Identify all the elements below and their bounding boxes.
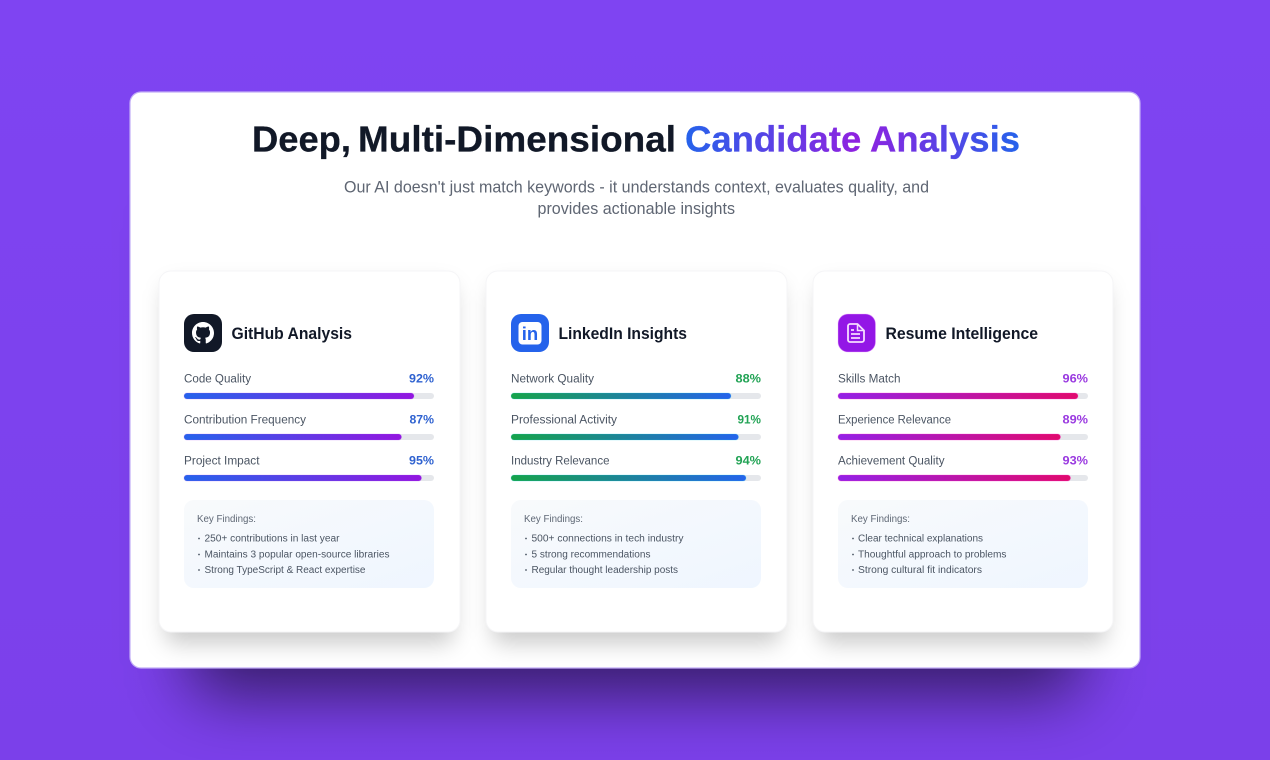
- main white panel: [130, 92, 1140, 668]
- heading: LinkedIn Insights: LinkedIn Insights: [558, 325, 687, 343]
- metric: Experience Relevance: Experience Relevance: [838, 414, 951, 426]
- heading: Resume Intelligence: Resume Intelligence: [886, 325, 1038, 343]
- key findings box: Thoughtful approach to problems: [858, 550, 1006, 560]
- metric: Skills Match: Skills Match: [838, 374, 900, 386]
- panel: Resume Intelligence: [813, 271, 1113, 644]
- metric: Code Quality: Code Quality: [184, 374, 251, 386]
- metric: Experience Relevance: [838, 414, 1088, 440]
- metric: Experience Relevance: 89%: [1062, 414, 1088, 426]
- metric: Network Quality: Network Quality: [511, 374, 594, 386]
- metric: Professional Activity: 91%: [738, 414, 761, 426]
- metric: Project Impact: Project Impact: [184, 456, 260, 468]
- key findings box: Regular thought leadership posts: [532, 565, 678, 576]
- key findings box: Key Findings:: [851, 514, 910, 525]
- icon: LinkedIn: [511, 314, 549, 352]
- panel shadow: [190, 200, 1080, 694]
- metric: Industry Relevance: Industry Relevance: [511, 456, 610, 468]
- key findings box: Maintains 3 popular open-source libraries: [204, 550, 390, 560]
- metric: Professional Activity: Professional Activity: [511, 414, 617, 426]
- key findings box: Strong cultural fit indicators: [858, 565, 982, 576]
- icon: document: [838, 314, 876, 352]
- heading: GitHub Analysis: GitHub Analysis: [232, 325, 352, 343]
- metric: Project Impact: [184, 456, 434, 481]
- metric: Project Impact: 95%: [409, 456, 434, 468]
- metric: Contribution Frequency: 87%: [410, 414, 434, 426]
- subtitle: Our AI doesn't just match keywords - it understands context, evaluates quality, and: [344, 178, 929, 196]
- metric: Network Quality: 88%: [736, 374, 761, 386]
- metric: Network Quality: [511, 374, 761, 399]
- panel: GitHub Analysis: [159, 271, 460, 644]
- key findings box: Key Findings:: [197, 514, 256, 525]
- panel: LinkedIn Insights: [486, 271, 787, 644]
- key findings box: 250+ contributions in last year: [204, 534, 340, 544]
- key findings box: [184, 500, 434, 588]
- key findings box: Clear technical explanations: [858, 534, 983, 544]
- metric: Skills Match: 96%: [1062, 374, 1088, 386]
- key findings box: [511, 500, 761, 588]
- key findings box: Key Findings:: [524, 514, 583, 525]
- subtitle: provides actionable insights: [538, 200, 735, 218]
- metric: Code Quality: [184, 374, 434, 399]
- icon: LinkedIn: in: [522, 323, 538, 344]
- metric: Industry Relevance: [511, 456, 761, 481]
- metric: Contribution Frequency: [184, 414, 434, 440]
- title: Multi-Dimensional: [358, 118, 676, 160]
- metric: Contribution Frequency: Contribution Frequency: [184, 414, 306, 426]
- key findings box: 5 strong recommendations: [532, 550, 650, 560]
- icon: GitHub: [184, 314, 222, 352]
- metric: Professional Activity: [511, 414, 761, 440]
- key findings box: [838, 500, 1088, 588]
- metric: Achievement Quality: Achievement Quality: [838, 456, 945, 468]
- title: Deep,: [252, 118, 351, 160]
- key findings box: Strong TypeScript & React expertise: [204, 565, 366, 576]
- metric: Achievement Quality: [838, 456, 1088, 481]
- metric: Achievement Quality: 93%: [1062, 456, 1088, 468]
- subtitle: [344, 178, 929, 218]
- metric: Skills Match: [838, 374, 1088, 399]
- title: [252, 118, 1020, 160]
- key findings box: 500+ connections in tech industry: [532, 534, 684, 544]
- title: Candidate Analysis: [685, 118, 1020, 160]
- metric: Industry Relevance: 94%: [736, 456, 761, 468]
- metric: Code Quality: 92%: [409, 374, 434, 386]
